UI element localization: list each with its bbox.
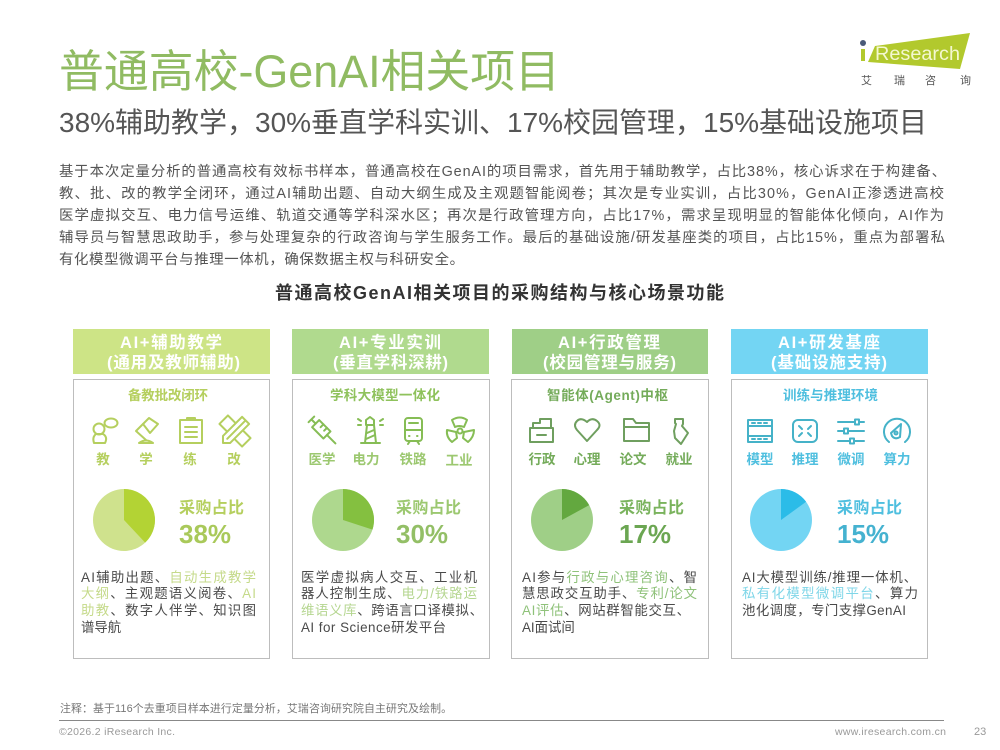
pie chart: 17% bbox=[531, 489, 593, 551]
logo: iResearch: Research bbox=[875, 44, 960, 65]
icon: heart bbox=[575, 419, 600, 441]
box heading: 训练与推理环境 bbox=[783, 387, 878, 403]
description: AI参与行政与心理咨询、智 bbox=[522, 569, 697, 585]
panel box bbox=[292, 380, 490, 658]
icon: lamp bbox=[136, 418, 158, 443]
icon: necktie bbox=[674, 419, 688, 444]
pie chart: 15% bbox=[750, 489, 812, 551]
share label: 采购占比 bbox=[837, 498, 902, 517]
logo: iResearch: 询 bbox=[960, 74, 971, 87]
description bbox=[81, 570, 256, 635]
box heading: 智能体(Agent)中枢 bbox=[547, 387, 668, 403]
icon labels: 练 bbox=[183, 451, 197, 467]
icon: lighthouse bbox=[358, 417, 383, 443]
box heading: 学科大模型一体化 bbox=[330, 387, 440, 403]
icon labels bbox=[308, 451, 472, 468]
description bbox=[742, 570, 918, 618]
description: AI for Science研发平台 bbox=[301, 620, 446, 635]
icon labels: 工业 bbox=[446, 453, 472, 468]
panel header: (校园管理与服务) bbox=[543, 352, 676, 372]
icon labels: 医学 bbox=[308, 451, 336, 467]
box heading: 备教批改闭环 bbox=[128, 387, 208, 403]
share value: 17% bbox=[619, 519, 671, 549]
icon: gauge bbox=[884, 419, 910, 442]
icon labels bbox=[746, 451, 910, 467]
panel header: (基础设施支持) bbox=[771, 352, 887, 372]
panel: AI+专业实训 bbox=[292, 329, 490, 658]
description: 大纲、主观题语义阅卷、AI bbox=[81, 586, 256, 601]
panel header: AI+专业实训 bbox=[339, 332, 441, 352]
icon labels bbox=[96, 451, 241, 467]
logo: iResearch bbox=[860, 33, 971, 87]
description: AI面试间 bbox=[522, 620, 575, 635]
panel header: AI+辅助教学 bbox=[120, 332, 222, 352]
description: AI辅助出题、自动生成教学 bbox=[81, 570, 256, 585]
panel: AI+行政管理 bbox=[512, 329, 708, 658]
title: 普通高校-GenAI相关项目 bbox=[59, 46, 560, 97]
icon: train bbox=[405, 418, 422, 444]
share label: 采购占比 bbox=[396, 498, 461, 517]
description bbox=[522, 569, 697, 635]
panel header: AI+行政管理 bbox=[558, 332, 660, 352]
panel header: (垂直学科深耕) bbox=[333, 352, 448, 372]
body paragraph: 基于本次定量分析的普通高校有效标书样本，普通高校在GenAI的项目需求，首先用于辅助教学，占比38%，核心诉求在于构建备、 bbox=[59, 163, 946, 180]
icon: teach bbox=[93, 418, 118, 443]
panel header bbox=[512, 329, 708, 374]
icon labels bbox=[528, 451, 692, 467]
panel: AI+辅助教学 bbox=[73, 329, 270, 658]
description: 私有化模型微调平台、算力 bbox=[742, 586, 918, 601]
description bbox=[301, 569, 483, 635]
panel header bbox=[292, 329, 489, 374]
body paragraph bbox=[59, 163, 946, 268]
copyright: ©2026.2 iResearch Inc. bbox=[59, 726, 175, 738]
panel box bbox=[74, 380, 270, 658]
icon: clipboard bbox=[180, 418, 202, 443]
share label: 采购占比 bbox=[179, 498, 244, 517]
body paragraph: 辅导员与智慧思政助手，参与处理复杂的行政咨询与学生服务工作。最后的基础设施/研发基座类的项目，占比15%，重点为部署私 bbox=[59, 228, 945, 246]
icon labels: 推理 bbox=[792, 452, 819, 467]
icon: folder bbox=[624, 419, 649, 441]
body paragraph: 教、批、改的教学全闭环，通过AI辅助出题、自动大纲生成及主观题智能阅卷；其次是专业实训，占比30%，GenAI正渗透进高校 bbox=[59, 184, 944, 202]
body paragraph: 医学虚拟交互、电力信号运维、轨道交通等学科深水区；再次是行政管理方向，占比17%，需求呈现明显的智能体化倾向，AI作为 bbox=[59, 206, 944, 224]
logo: iResearch: 瑞 bbox=[894, 73, 905, 87]
icon: radiation bbox=[447, 418, 474, 442]
website: www.iresearch.com.cn bbox=[834, 726, 946, 738]
description: 器人控制生成、电力/铁路运 bbox=[301, 586, 477, 601]
panel header bbox=[731, 329, 928, 374]
icon labels: 学 bbox=[139, 451, 153, 467]
icon: inference frame bbox=[793, 420, 817, 442]
description: 谱导航 bbox=[81, 620, 121, 635]
description: AI评估、网站群智能交互、 bbox=[522, 602, 690, 618]
icon labels: 就业 bbox=[666, 451, 692, 467]
panel header: (通用及教师辅助) bbox=[107, 352, 240, 372]
icon labels: 行政 bbox=[528, 452, 556, 467]
share label: 采购占比 bbox=[619, 498, 684, 517]
logo: iResearch: 咨 bbox=[925, 73, 936, 87]
icon labels: 改 bbox=[227, 451, 241, 467]
icon: sliders bbox=[838, 420, 864, 444]
logo: iResearch: 艾 bbox=[861, 74, 872, 87]
icon labels: 模型 bbox=[746, 451, 774, 467]
description: 维语义库、跨语言口译模拟、 bbox=[301, 603, 483, 618]
share value: 30% bbox=[396, 519, 448, 549]
footnote: 注释：基于116个去重项目样本进行定量分析，艾瑞咨询研究院自主研究及绘制。 bbox=[60, 701, 452, 715]
share value: 38% bbox=[179, 519, 231, 549]
icon labels: 铁路 bbox=[400, 452, 427, 467]
icon: film strip bbox=[748, 420, 772, 442]
icon: syringe bbox=[308, 416, 339, 447]
panel header bbox=[73, 329, 270, 374]
icon labels: 心理 bbox=[574, 452, 601, 467]
body paragraph: 有化模型微调平台与推理一体机，确保数据主权与科研安全。 bbox=[59, 250, 464, 268]
pie chart: 30% bbox=[312, 489, 374, 551]
icon labels: 算力 bbox=[884, 451, 910, 467]
icon labels: 教 bbox=[96, 452, 110, 467]
description: 助教、数字人伴学、知识图 bbox=[81, 602, 256, 618]
section heading: 普通高校GenAI相关项目的采购结构与核心场景功能 bbox=[275, 282, 724, 303]
pie chart: 38% bbox=[93, 489, 155, 551]
description: AI大模型训练/推理一体机、 bbox=[742, 570, 917, 585]
icon: drawer bbox=[530, 419, 553, 442]
panel header: AI+研发基座 bbox=[778, 332, 880, 352]
icon labels: 电力 bbox=[352, 452, 380, 467]
description: 慧思政交互助手、专利/论文 bbox=[522, 585, 697, 601]
panel box bbox=[512, 380, 708, 658]
icon labels: 微调 bbox=[838, 451, 864, 467]
description: 池化调度，专门支撑GenAI bbox=[742, 603, 906, 618]
icon: pencil and ruler bbox=[219, 415, 251, 447]
subtitle: 38%辅助教学，30%垂直学科实训、17%校园管理，15%基础设施项目 bbox=[59, 107, 927, 138]
page number: 23 bbox=[974, 726, 986, 738]
panel box bbox=[732, 380, 928, 658]
description: 医学虚拟病人交互、工业机 bbox=[301, 569, 478, 585]
share value: 15% bbox=[837, 519, 889, 549]
icon labels: 论文 bbox=[620, 451, 647, 467]
panel: AI+研发基座 bbox=[731, 329, 928, 658]
